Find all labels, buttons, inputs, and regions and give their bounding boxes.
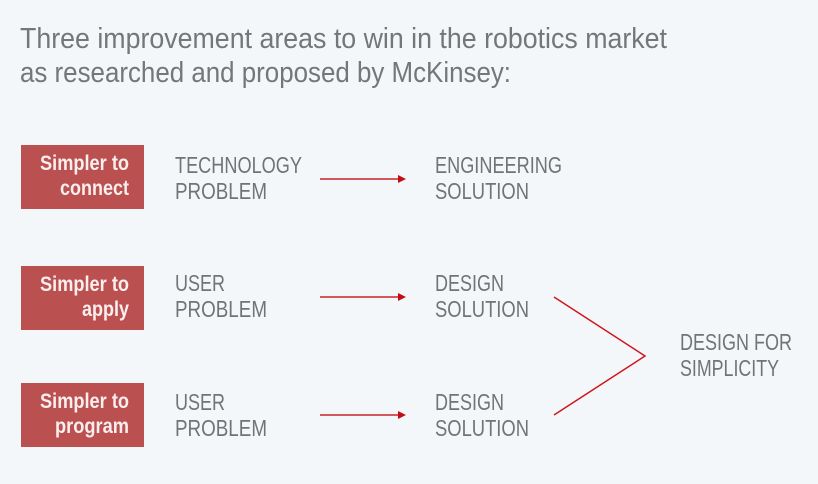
red label: simpler to connect: Simpler to [40,152,129,175]
panel: row 1 simpler to connect [21,145,562,209]
text: design solution: SOLUTION [435,296,529,322]
red label: simpler to connect [21,145,144,209]
text: user problem: USER [175,270,225,296]
text: engineering solution [435,152,562,204]
text: engineering solution: ENGINEERING [435,152,562,178]
panel: row 2 simpler to apply [21,266,529,330]
text: design solution: DESIGN [435,389,504,415]
arrow: row 3 [320,411,406,419]
text: user problem: PROBLEM [175,415,267,441]
text: engineering solution: SOLUTION [435,178,529,204]
text: user problem [175,389,267,441]
text: user problem: USER [175,389,225,415]
arrow: converging chevron [554,297,645,415]
text: technology problem [175,152,302,204]
title [20,23,667,89]
text: user problem: PROBLEM [175,296,267,322]
red label: simpler to program: program [55,415,129,438]
text: design for simplicity: SIMPLICITY [680,355,779,381]
title: Three improvement areas to win in the robotics market [20,23,667,55]
text: technology problem: TECHNOLOGY [175,152,302,178]
arrow: row 1 [320,175,406,183]
text: design solution: SOLUTION [435,415,529,441]
text: design solution: DESIGN [435,270,504,296]
text: design solution [435,389,529,441]
red label: simpler to program: Simpler to [40,390,129,413]
text: user problem [175,270,267,322]
text: technology problem: PROBLEM [175,178,267,204]
text: design solution [435,270,529,322]
arrow: row 2 [320,293,406,301]
red label: simpler to apply [21,266,144,330]
panel: row 3 simpler to program [21,383,529,447]
red label: simpler to connect: connect [60,177,129,200]
red label: simpler to apply: apply [82,298,129,321]
title: as researched and proposed by McKinsey: [20,57,511,89]
red label: simpler to program [21,383,144,447]
red label: simpler to apply: Simpler to [40,273,129,296]
text: design for simplicity [680,329,792,381]
